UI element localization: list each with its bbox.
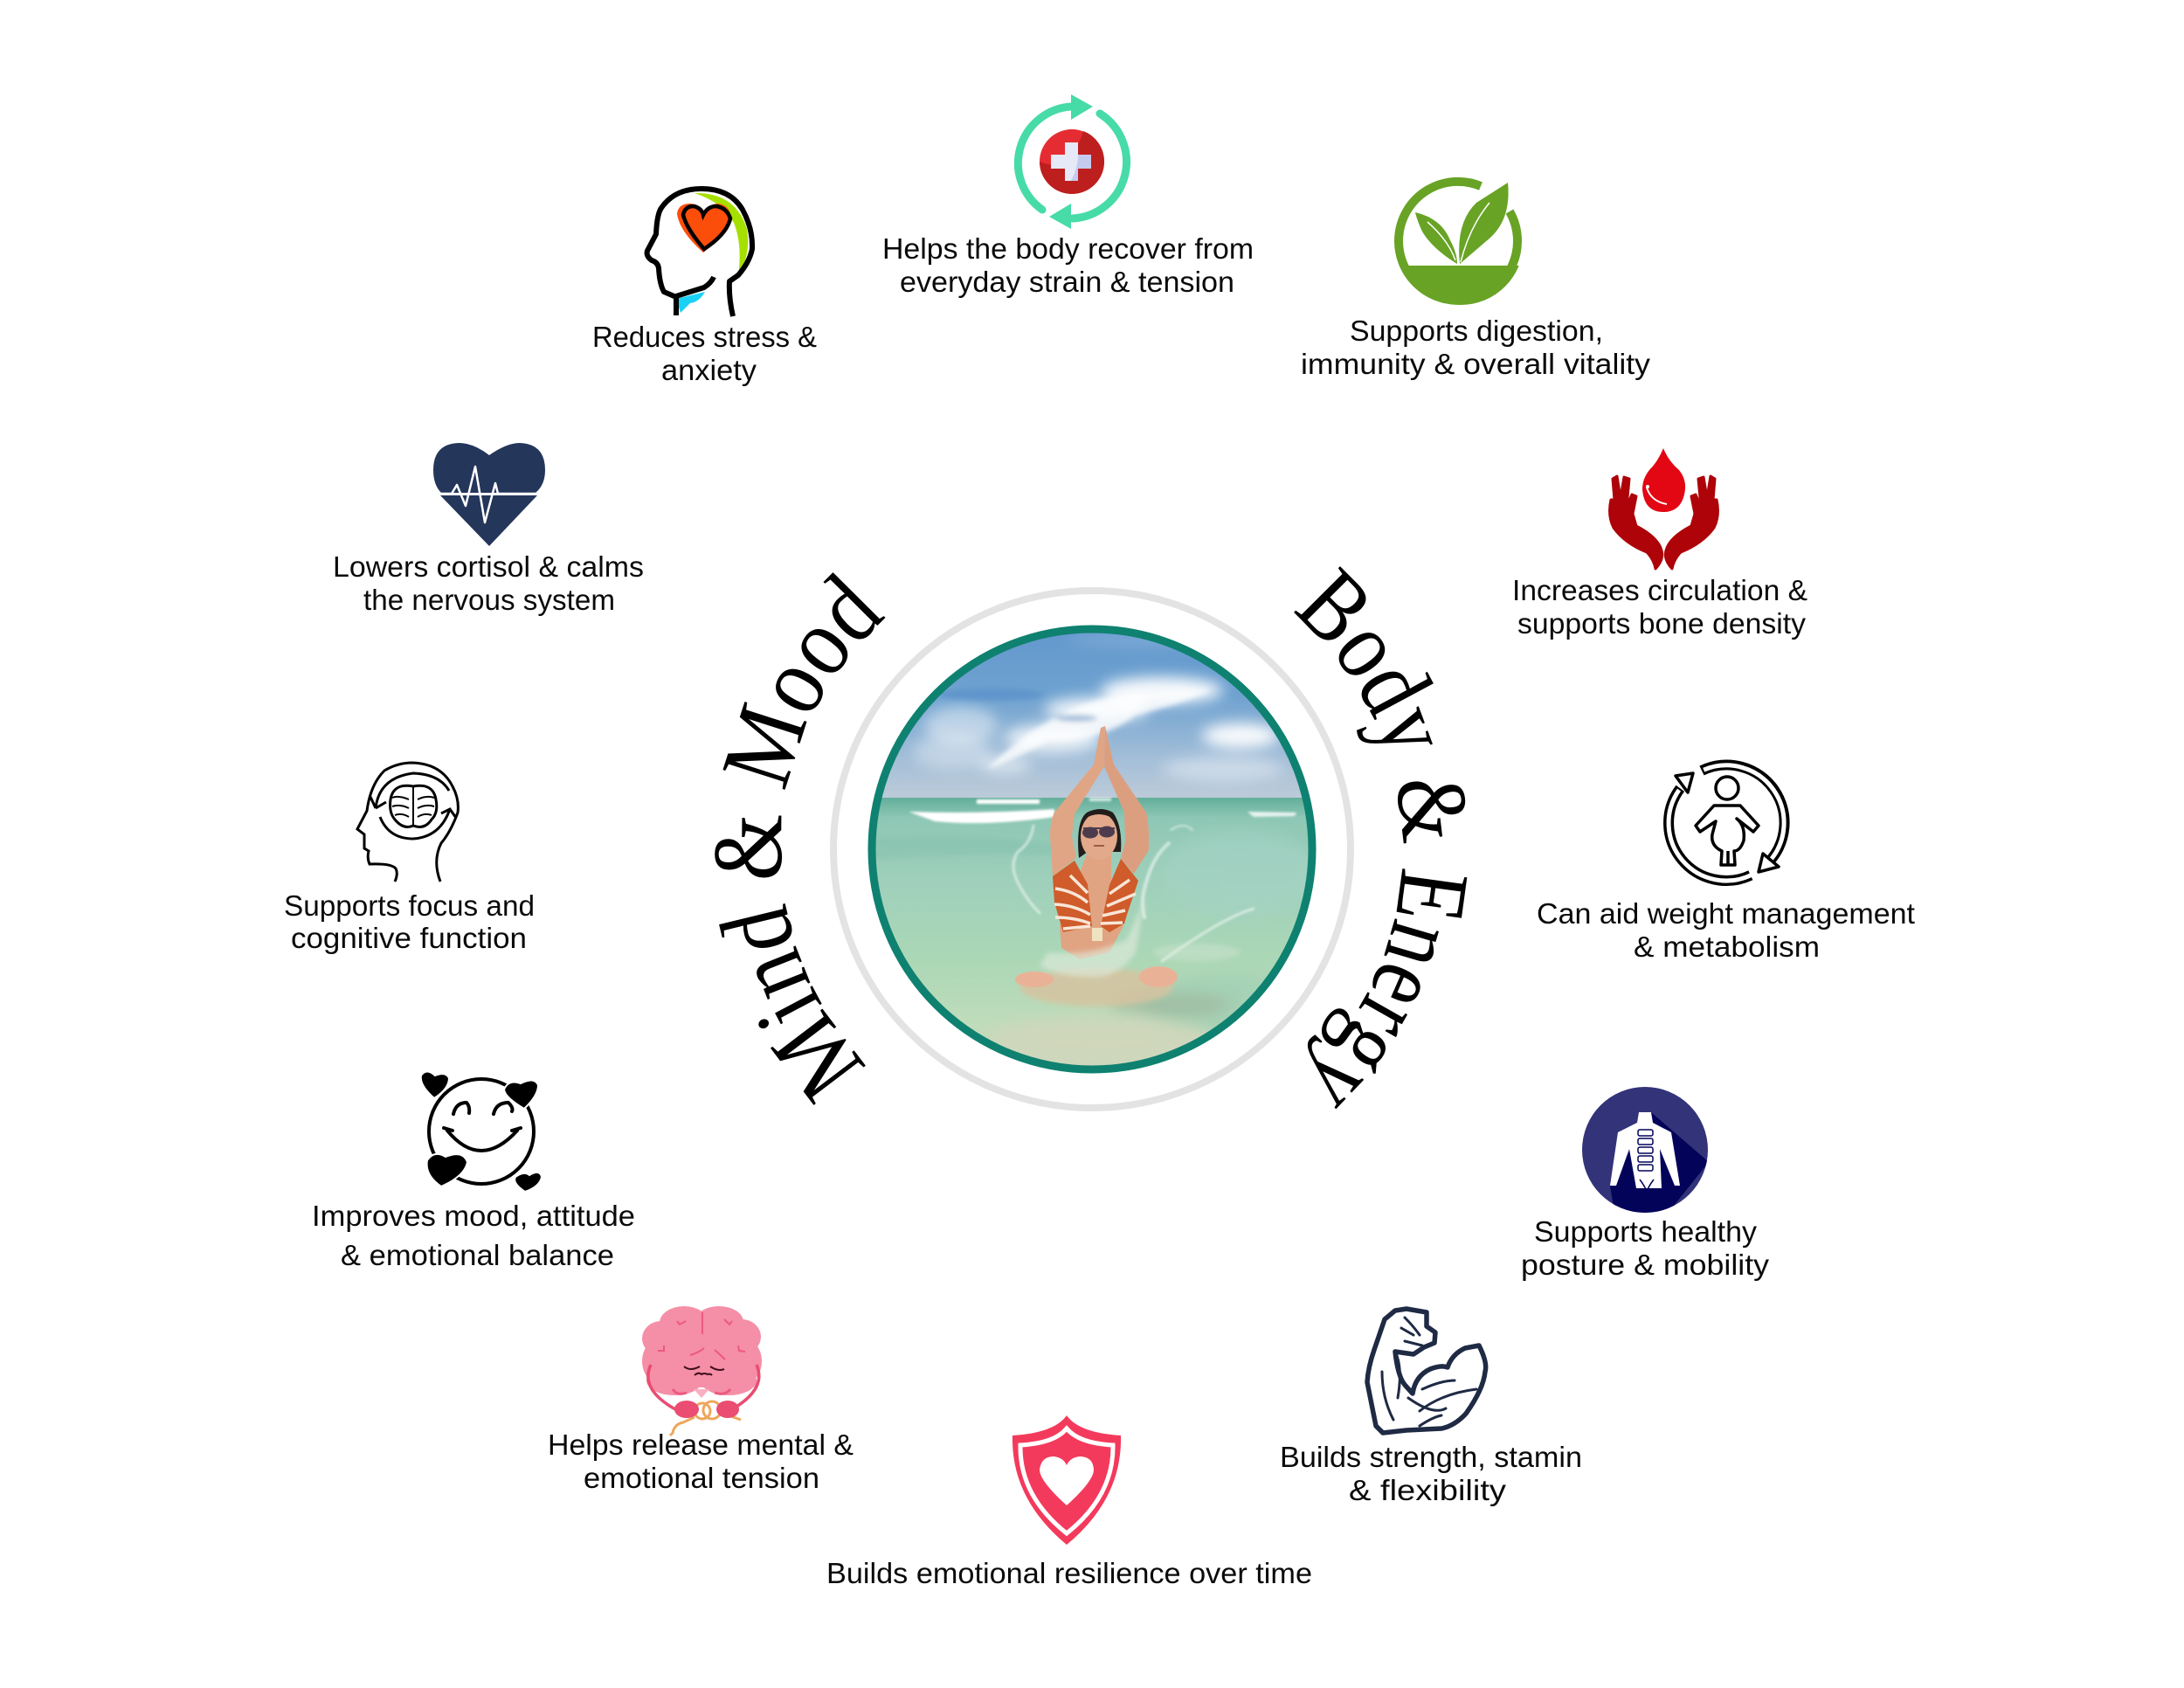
icon: leaves in green ring: [1398, 179, 1524, 305]
label: [1537, 897, 1915, 963]
benefit: cortisol and nervous system: [333, 443, 644, 616]
arms: [1050, 726, 1105, 876]
label: [1280, 1441, 1582, 1506]
icon: head with heart: [647, 189, 752, 316]
teal photo border: [872, 629, 1312, 1069]
label: Builds emotional resilience over time: [826, 1557, 1312, 1589]
label: Can aid weight management: [1537, 897, 1915, 930]
icon: recovery arrows and medical cross: [1018, 94, 1127, 229]
benefit: mental and emotional release: [548, 1306, 854, 1494]
label: emotional tension: [584, 1462, 819, 1494]
label: & emotional balance: [341, 1239, 614, 1271]
benefit: body recovery: [882, 94, 1254, 298]
label: [882, 232, 1254, 298]
label: Supports digestion,: [1350, 315, 1603, 347]
benefit: emotional resilience: [826, 1415, 1312, 1589]
label: cognitive function: [291, 922, 527, 954]
benefit: weight and metabolism: [1537, 764, 1915, 963]
label: Helps the body recover from: [882, 232, 1254, 265]
label: everyday strain & tension: [900, 266, 1234, 298]
label: & flexibility: [1349, 1474, 1507, 1506]
benefit: focus and cognition: [284, 763, 535, 954]
benefit: mood and emotional balance: [312, 1071, 635, 1271]
label: Supports healthy: [1534, 1215, 1758, 1248]
label: supports bone density: [1517, 607, 1806, 640]
icon: spine on blue circle: [1582, 1087, 1709, 1223]
face: [1081, 814, 1117, 854]
benefit: circulation and bone density: [1512, 448, 1807, 640]
label: [592, 321, 817, 386]
icon: smiley with hearts: [421, 1071, 542, 1192]
icon: body within circular arrows: [1669, 764, 1785, 881]
curved heading: Body & Energy: Body & Energy: [1294, 566, 1468, 1110]
label: Increases circulation &: [1512, 574, 1807, 606]
central photo: yoga pose in the sea: [875, 633, 1309, 1066]
swimsuit: [1053, 861, 1092, 932]
icon: flexed arm: [1367, 1309, 1486, 1433]
label: [1512, 574, 1807, 640]
icon: shield with heart: [1013, 1415, 1121, 1545]
label: the nervous system: [363, 584, 615, 616]
label: [312, 1200, 635, 1271]
icon: head with brain and arrows: [357, 763, 458, 882]
label: [1301, 315, 1651, 380]
icon: pink brain untying a knot: [642, 1306, 762, 1435]
label: immunity & overall vitality: [1301, 348, 1651, 380]
benefit: digestion and vitality: [1301, 179, 1651, 380]
label: & metabolism: [1634, 930, 1820, 963]
label: Lowers cortisol & calms: [333, 550, 644, 583]
outer grey ring: [833, 591, 1351, 1108]
sunglasses: [1082, 827, 1115, 839]
torso: [1060, 852, 1123, 959]
hair back: [1078, 809, 1121, 858]
water splash: [1013, 826, 1254, 961]
label: Supports focus and: [284, 889, 535, 922]
label: [284, 889, 535, 954]
label: Reduces stress &: [592, 321, 817, 353]
curved heading: Mind & Mood: Mind & Mood: [715, 572, 886, 1105]
label: anxiety: [661, 354, 757, 386]
label: [1521, 1215, 1770, 1281]
icon: blood drop over cupped hands: [1610, 448, 1717, 569]
icon: navy heart with pulse line: [433, 443, 545, 546]
label: Improves mood, attitude: [312, 1200, 635, 1232]
benefit: strength and flexibility: [1280, 1309, 1582, 1506]
benefit: posture and mobility: [1521, 1087, 1770, 1281]
label: Helps release mental &: [548, 1429, 854, 1461]
label: [548, 1429, 854, 1494]
label: [333, 550, 644, 616]
benefit: stress reduction: [592, 189, 817, 386]
waves: [909, 798, 1296, 823]
label: Builds strength, stamin: [1280, 1441, 1582, 1473]
submerged legs: [1019, 968, 1173, 1007]
label: posture & mobility: [1521, 1249, 1770, 1281]
